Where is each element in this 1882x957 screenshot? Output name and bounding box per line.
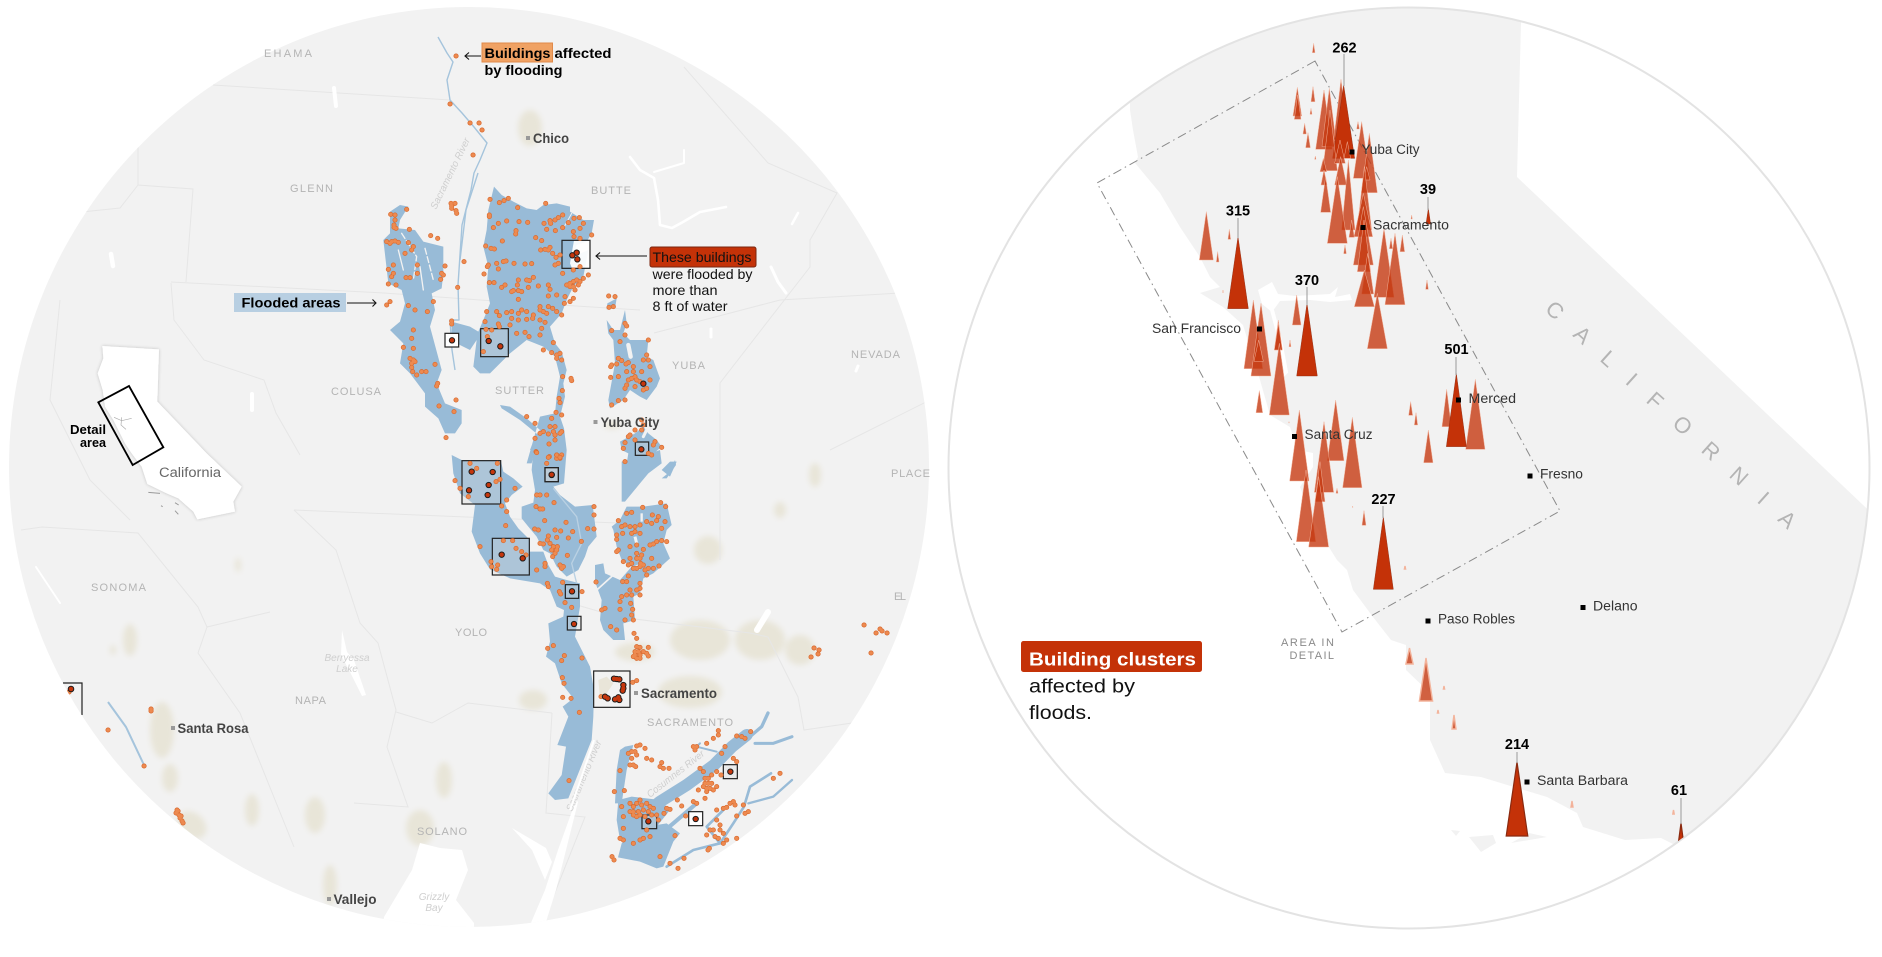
value labels: 61	[1671, 783, 1687, 799]
annotation: these buildings flooded by more than 8 ft	[596, 247, 756, 314]
annotation: these buildings flooded by more than 8 ft: 8 ft of water	[652, 298, 728, 314]
value labels: 39	[1420, 182, 1436, 198]
county labels: YOLO	[455, 627, 487, 639]
city labels	[171, 131, 717, 907]
value labels	[1226, 40, 1687, 799]
city labels and markers: Sacramento	[1373, 218, 1449, 232]
value labels: 315	[1226, 204, 1250, 220]
county labels: GLENN	[290, 183, 333, 195]
river labels: Berryessa	[324, 653, 370, 664]
inset: California locator: area	[80, 436, 107, 450]
Lake Berryessa	[341, 630, 366, 696]
river labels: Cosumnes River	[645, 748, 707, 800]
area in detail label	[1281, 637, 1334, 662]
value labels: 501	[1444, 342, 1469, 358]
county labels: SACRAMENTO	[647, 717, 733, 729]
detail area outline	[1097, 61, 1560, 632]
lakes	[36, 88, 858, 630]
map circle	[949, 8, 1869, 928]
city labels and markers: Fresno	[1540, 466, 1583, 482]
inset: California locator: California	[159, 465, 222, 480]
county labels: COLUSA	[331, 386, 382, 398]
river labels: Sacramento River	[565, 738, 605, 813]
river labels: Lake	[336, 664, 358, 675]
annotation: buildings affected by flooding: by flooding	[484, 62, 562, 78]
city labels: Vallejo	[334, 892, 376, 907]
triangles: north cluster	[1199, 43, 1431, 350]
edge box at left of map	[63, 683, 82, 715]
triangles: southern coast	[1404, 566, 1685, 853]
California shape	[98, 346, 242, 519]
legend: building clusters	[1021, 641, 1202, 724]
area in detail label: DETAIL	[1290, 650, 1334, 662]
city labels and markers: Delano	[1593, 598, 1638, 614]
county labels: BUTTE	[591, 185, 631, 197]
triangles: south cluster	[1244, 300, 1485, 589]
map base circle	[9, 7, 929, 927]
inset labels: Detail	[70, 423, 106, 437]
city labels: Chico	[533, 131, 569, 146]
flooded river branches	[630, 713, 792, 867]
value labels: 214	[1505, 737, 1529, 753]
annotation: flooded areas: Flooded areas	[242, 294, 341, 310]
county labels: SONOMA	[91, 582, 147, 594]
city labels and markers: Santa Cruz	[1304, 427, 1373, 442]
city labels and markers: San Francisco	[1152, 321, 1241, 336]
river labels: Bay	[425, 903, 444, 914]
panel: flooded areas map	[9, 7, 930, 950]
legend: building clusters: Building clusters	[1029, 650, 1196, 670]
annotation: these buildings flooded by more than 8 ft: more than	[652, 282, 718, 298]
city labels: Santa Rosa	[178, 721, 249, 736]
inset: California locator	[70, 346, 242, 519]
thin rivers	[108, 37, 487, 765]
county labels	[91, 48, 930, 838]
California land	[1130, 8, 1866, 852]
base map details	[21, 67, 930, 950]
annotation: these buildings flooded by more than 8 ft: These buildings	[652, 249, 752, 265]
county labels: SUTTER	[495, 385, 544, 397]
city labels: Yuba City	[600, 415, 660, 430]
county labels: PLACE	[891, 468, 930, 480]
county labels: NAPA	[295, 695, 327, 707]
leader lines	[1238, 54, 1681, 824]
value labels: 370	[1295, 273, 1319, 289]
urban areas	[110, 110, 821, 905]
highlighted building boxes	[445, 240, 649, 482]
dark dots: deeply flooded buildings	[452, 253, 730, 821]
city labels and markers: Santa Barbara	[1537, 773, 1629, 788]
county labels: YUBA	[672, 360, 706, 372]
annotation: flooded areas	[234, 293, 376, 312]
river labels: Grizzly	[419, 892, 450, 903]
river labels	[324, 136, 707, 914]
city labels: Sacramento	[641, 686, 717, 701]
county labels: NEVADA	[851, 349, 901, 361]
city labels and markers: Merced	[1468, 391, 1516, 406]
county lines	[21, 67, 930, 900]
orange dots: affected buildings	[69, 56, 887, 868]
Suisun Bay	[384, 843, 474, 927]
river labels: Sacramento River	[429, 136, 473, 211]
panel: building clusters map	[948, 0, 1882, 957]
city labels and markers: Yuba City	[1362, 142, 1420, 157]
annotation: these buildings flooded by more than 8 ft: were flooded by	[651, 266, 752, 282]
circle outline	[948, 8, 1870, 928]
annotation: buildings affected by flooding	[465, 43, 612, 78]
legend: building clusters: floods.	[1029, 703, 1092, 724]
city labels and markers: Paso Robles	[1438, 612, 1515, 626]
flooded area holes	[398, 213, 648, 437]
value labels: 227	[1371, 492, 1396, 508]
annotation: buildings affected by flooding: Buildings	[484, 45, 551, 61]
county labels: SOLANO	[417, 826, 467, 838]
value labels: 262	[1332, 40, 1357, 56]
annotation: buildings affected by flooding: affected	[554, 45, 612, 61]
area in detail label: AREA IN	[1281, 637, 1334, 649]
legend: building clusters: affected by	[1029, 676, 1136, 698]
city labels and markers	[1152, 142, 1638, 788]
flooded areas, north	[383, 187, 676, 478]
county labels: EL	[894, 591, 906, 603]
lower Sacramento River channel	[512, 800, 578, 925]
California label: CALIFORNIA	[1541, 296, 1801, 534]
flooded areas, south	[452, 450, 680, 868]
highlighted building boxes, south	[462, 461, 737, 829]
river channel and white gaps	[553, 488, 642, 810]
county labels: EHAMA	[264, 48, 313, 60]
